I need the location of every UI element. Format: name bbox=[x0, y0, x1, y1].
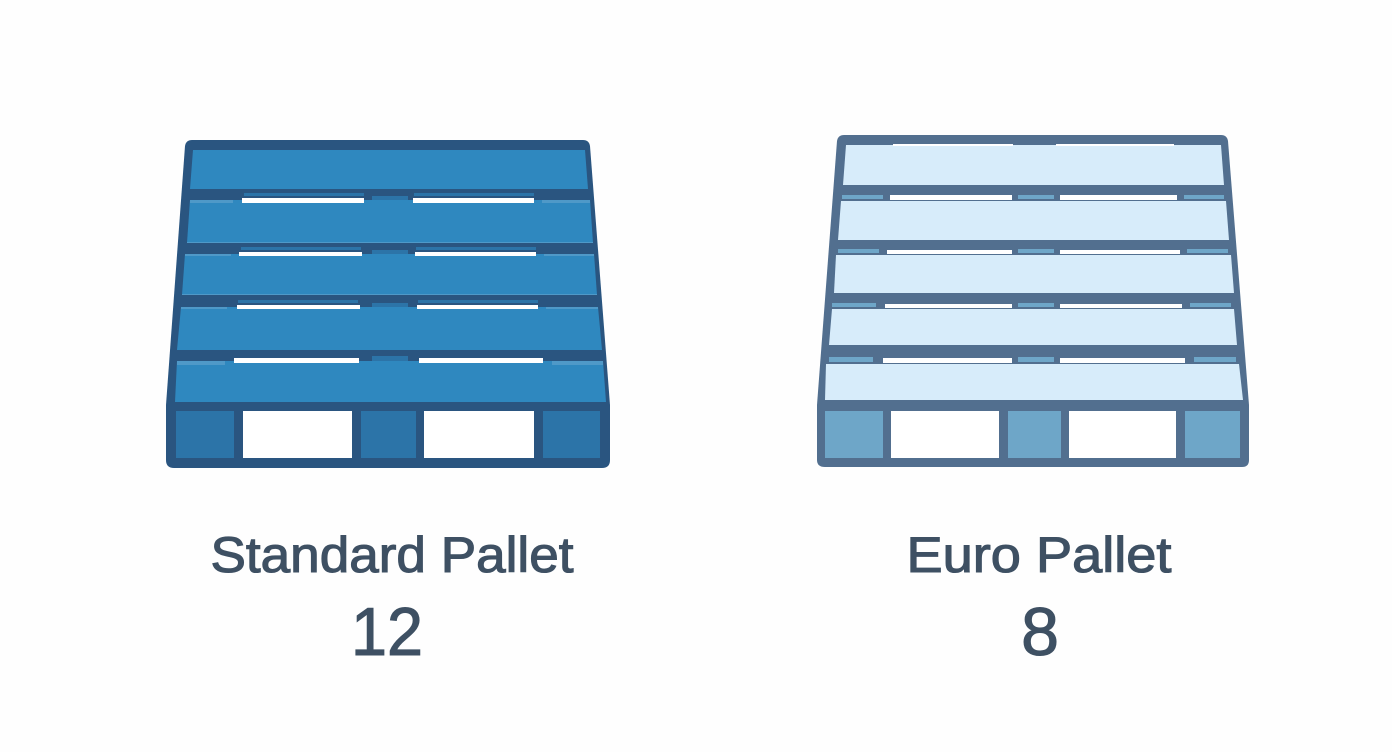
icon: standard pallet bbox=[166, 140, 610, 468]
label: euro pallet: Euro Pallet bbox=[906, 527, 1172, 583]
panel: euro pallet bbox=[817, 135, 1249, 670]
icon: euro pallet bbox=[817, 135, 1249, 467]
value: standard pallet: 12 bbox=[351, 594, 423, 670]
label: standard pallet: Standard Pallet bbox=[210, 527, 574, 583]
value: euro pallet: 8 bbox=[1021, 594, 1059, 670]
panel: standard pallet bbox=[166, 140, 610, 670]
